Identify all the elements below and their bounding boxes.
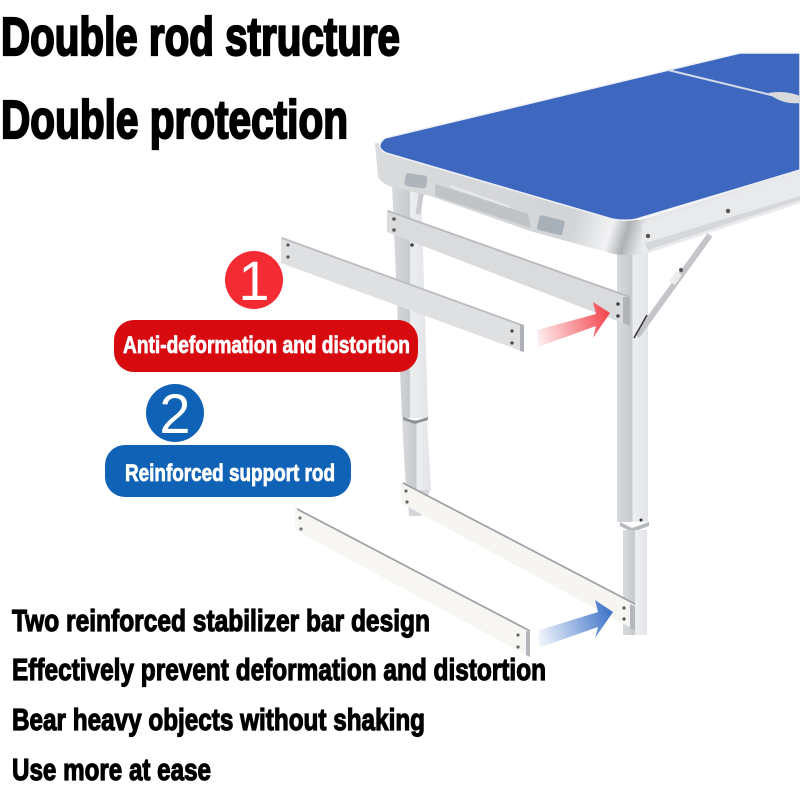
feature list: Bear heavy objects without shaking — [12, 702, 425, 737]
title: Double protection — [1, 90, 348, 150]
title — [1, 7, 400, 150]
upper attached bar — [387, 210, 630, 326]
blue arrow — [538, 600, 613, 647]
pill: anti-deformation — [114, 320, 418, 372]
lower attached bar — [401, 482, 635, 630]
table rim — [375, 143, 800, 255]
pill: reinforced support rod: Reinforced support rod — [125, 460, 335, 487]
pill: reinforced support rod — [105, 445, 351, 497]
floating bar 1 — [281, 237, 524, 352]
left leg — [392, 185, 431, 516]
feature list: Use more at ease — [12, 752, 211, 787]
right leg — [617, 250, 649, 635]
folding brace — [634, 235, 710, 338]
feature list: Two reinforced stabilizer bar design — [12, 603, 430, 638]
badge 2 — [146, 382, 204, 445]
badge 1: 1 — [238, 249, 270, 312]
pill: anti-deformation: Anti-deformation and distortion — [123, 332, 410, 359]
feature list — [12, 603, 546, 787]
front handle — [404, 173, 565, 236]
feature list: Effectively prevent deformation and distortion — [12, 652, 546, 687]
title: Double rod structure — [1, 7, 400, 67]
table seam and handle hole — [668, 70, 800, 103]
badge 2: 2 — [159, 382, 191, 445]
blue table top — [380, 53, 800, 220]
badge 1 — [225, 249, 283, 312]
folding table illustration — [375, 53, 800, 635]
red arrow — [537, 302, 610, 347]
table side highlights — [641, 172, 800, 253]
floating bar 2 — [295, 508, 530, 657]
